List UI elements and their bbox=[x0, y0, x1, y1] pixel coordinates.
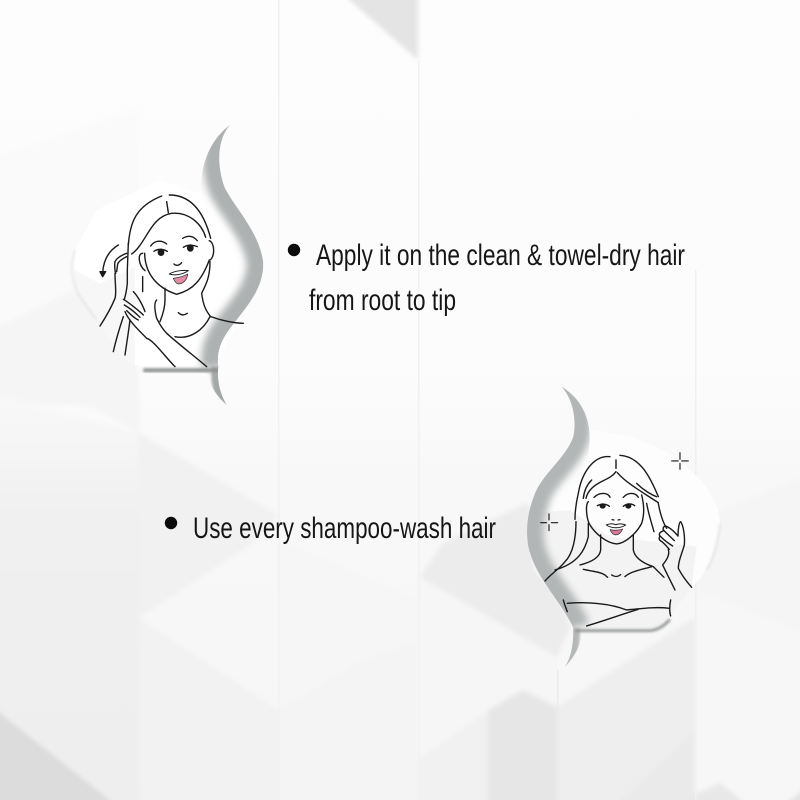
curved paper-cut panel bbox=[527, 380, 720, 667]
line drawing: woman combing hair bbox=[100, 195, 243, 367]
illustration: applying serum to hair bbox=[72, 117, 263, 405]
text: apply instructions: Apply it on the clean & towel-dry hair bbox=[316, 239, 685, 272]
raised hand bbox=[659, 522, 692, 590]
line drawing: woman with shiny hair bbox=[541, 453, 692, 626]
text: apply instructions bbox=[309, 239, 685, 317]
bullet: usage step bbox=[165, 517, 177, 529]
curved paper-cut panel bbox=[72, 117, 263, 405]
text: apply instructions: from root to tip bbox=[309, 284, 456, 317]
bullet: apply step bbox=[288, 244, 300, 256]
illustration: shiny hair bbox=[527, 380, 720, 667]
text: usage instructions: Use every shampoo-wash hair bbox=[193, 512, 496, 545]
hand and comb bbox=[100, 243, 207, 367]
